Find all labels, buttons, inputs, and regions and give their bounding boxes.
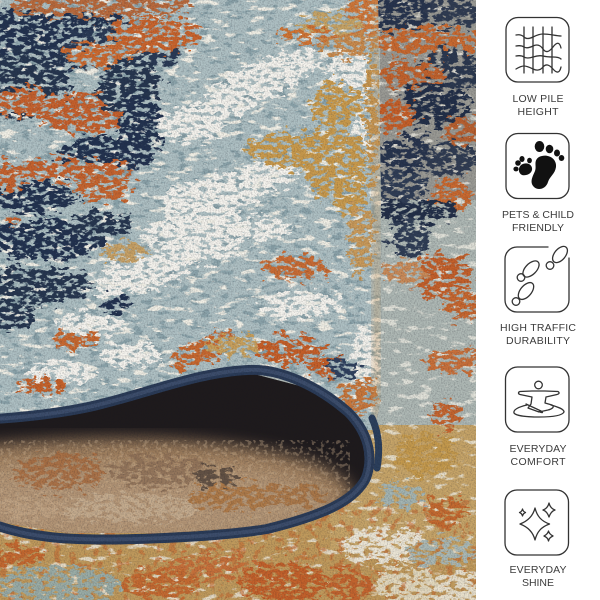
icon: low pile weave: [506, 18, 569, 82]
feature: everyday comfort: [506, 367, 569, 468]
gold and orange accents: [16, 0, 385, 411]
white and cream highlights: [26, 37, 379, 394]
label: low pile height: LOW PILE: [512, 93, 564, 105]
feature: pets and child friendly: [502, 134, 574, 234]
right edge shading of the roll: [372, 0, 382, 430]
feature: low pile height: [506, 18, 569, 118]
underside of the rug: [0, 373, 372, 545]
woven backing: [0, 439, 352, 545]
label: everyday shine: SHINE: [522, 577, 554, 589]
label: everyday shine: EVERYDAY: [510, 564, 566, 576]
label: high traffic durability: DURABILITY: [506, 335, 570, 347]
icon: paw and foot prints: [506, 134, 569, 198]
icon: meditating figure: [506, 367, 569, 432]
feature: everyday shine: [505, 490, 568, 589]
icon: sparkles: [505, 490, 568, 555]
label: pets and child friendly: FRIENDLY: [512, 222, 564, 234]
dark hollow: [0, 373, 372, 533]
label: high traffic durability: HIGH TRAFFIC: [500, 322, 576, 334]
feature: high traffic durability: [500, 244, 576, 347]
white feature column: [476, 0, 600, 600]
navy and orange pattern at upper left: [0, 0, 201, 329]
label: low pile height: HEIGHT: [518, 106, 559, 118]
navy binding edge: [0, 370, 379, 539]
icon: shoe prints: [505, 244, 570, 312]
label: everyday comfort: EVERYDAY: [510, 443, 566, 455]
fine pile texture: [0, 0, 476, 600]
rolled rug surface: [0, 0, 385, 430]
label: pets and child friendly: PETS & CHILD: [502, 209, 574, 221]
label: everyday comfort: COMFORT: [510, 456, 566, 468]
